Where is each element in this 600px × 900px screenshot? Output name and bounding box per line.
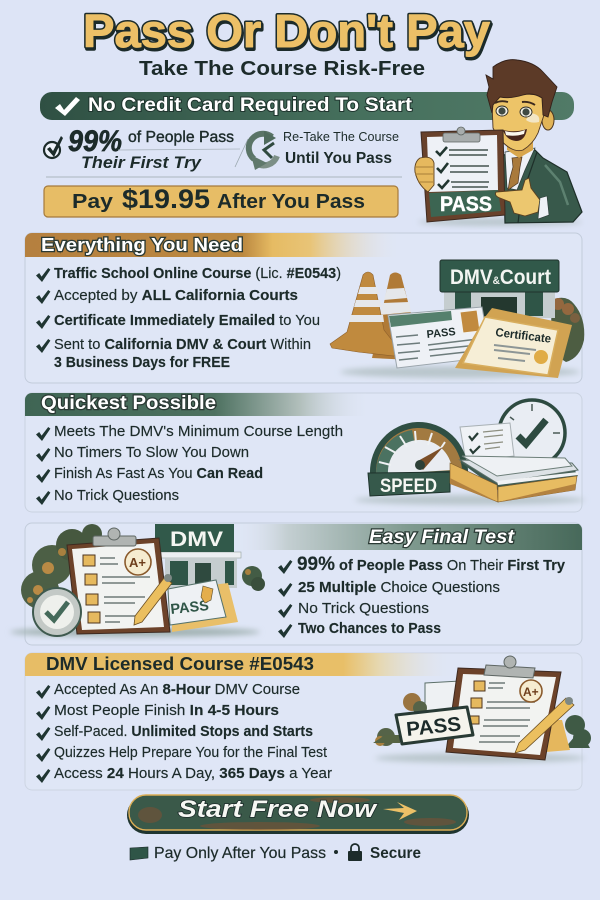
list: test facts (278, 554, 566, 638)
button label: Start Free Now (178, 796, 378, 823)
test clipboard (67, 528, 170, 634)
footer secure text: Secure (370, 845, 421, 862)
price bar (44, 184, 398, 217)
title: Pass Or Don't Pay (83, 5, 490, 57)
traffic cones (330, 272, 414, 360)
DMV and Court sign (440, 260, 559, 292)
list: course facts (36, 682, 332, 783)
bullet (334, 850, 338, 854)
icon: retake arrows (249, 131, 277, 170)
illustration: speedometer, clock and books (355, 400, 585, 505)
PASS card: PASS (170, 598, 210, 618)
parcel box (450, 463, 577, 502)
pass caption: of People Pass (128, 129, 234, 146)
list: test facts: 25 Multiple Choice Questions (298, 580, 500, 596)
panel: everything you need (25, 233, 584, 383)
speedometer (370, 422, 468, 480)
header band (25, 233, 400, 257)
list: speed features: Finish As Fast As You Can Read (54, 466, 263, 482)
list: speed features: No Trick Questions (54, 488, 179, 504)
clipboard (421, 127, 505, 222)
grade A+: A+ (129, 555, 146, 570)
certificate (455, 308, 572, 378)
pencil (134, 574, 172, 625)
icon: money (130, 847, 148, 860)
shirt and tie (505, 148, 535, 190)
DMV sign: DMV (170, 528, 223, 551)
panel: easy final test (10, 523, 582, 645)
benefit: 99 percent pass (44, 125, 234, 172)
certificate: Certificate (495, 325, 552, 346)
heading: Everything You Need (41, 234, 243, 255)
face (492, 92, 545, 151)
benefit: re-take (249, 129, 399, 170)
answer boxes (468, 681, 485, 724)
icon: arrow (383, 802, 417, 820)
PASS sign (396, 707, 473, 744)
title: Pass Or Don't Pay (84, 7, 491, 59)
list: speed features (36, 424, 343, 505)
list: speed features: No Timers To Slow You Down (54, 445, 249, 461)
list: features: Sent to California DMV & Court Within (54, 337, 311, 353)
character with clipboard (415, 60, 582, 226)
court building (444, 290, 555, 318)
pencil (515, 697, 574, 753)
list: test facts: No Trick Questions (298, 601, 429, 617)
clipboard checklist (436, 147, 489, 188)
header band (25, 653, 455, 676)
until pass line: Until You Pass (285, 150, 392, 167)
check badge (33, 588, 81, 636)
ear (542, 110, 554, 130)
list: course facts: Most People Finish In 4-5 Hours (54, 703, 279, 719)
panel: DMV licensed course (25, 653, 591, 790)
clip (484, 656, 535, 678)
illustration: clipboard and DMV (10, 524, 265, 637)
price text: $19.95 (122, 184, 210, 214)
licensed clipboard (446, 656, 561, 760)
list: features: Traffic School Online Course (Lic. #E0543) (54, 266, 341, 282)
banner text: No Credit Card Required To Start (88, 95, 413, 116)
DMV and Court sign: DMV&Court (450, 266, 551, 289)
list: features: Accepted by ALL California Courts (54, 288, 298, 304)
mouth (503, 129, 527, 141)
eyes (495, 101, 535, 117)
clip (93, 528, 136, 546)
price text: Pay (72, 191, 114, 213)
answer boxes (83, 555, 100, 623)
list: test facts: 99% of People Pass On Their First Try (297, 554, 566, 575)
title: Pass Or Don't Pay (83, 5, 490, 57)
DMV sign (155, 524, 234, 552)
ground shadow (418, 218, 582, 226)
checklist note (460, 423, 514, 462)
illustration: cones, documents and court (330, 260, 584, 378)
clipboard clip (443, 127, 480, 142)
icon: banner check (55, 97, 80, 116)
bush (550, 298, 584, 362)
neck (507, 138, 533, 158)
stack of papers (460, 456, 578, 490)
list: speed features: Meets The DMV's Minimum Course Length (54, 424, 343, 440)
list: course facts: Self-Paced. Unlimited Stops and Starts (54, 724, 313, 740)
list: features: 3 Business Days for FREE (54, 355, 230, 371)
heading: DMV Licensed Course #E0543 (46, 654, 314, 674)
PASS card (388, 307, 491, 368)
list: test facts: Two Chances to Pass (298, 621, 441, 637)
retake line: Re-Take The Course (283, 129, 399, 144)
grade A+: A+ (523, 685, 539, 699)
DMV building (161, 552, 241, 588)
suit (503, 150, 582, 223)
hair (486, 60, 557, 117)
PASS sign: PASS (405, 713, 462, 741)
heading: Quickest Possible (41, 392, 216, 414)
footer pay text: Pay Only After You Pass (154, 845, 326, 862)
list: features: Certificate Immediately Emailed to You (54, 313, 320, 329)
clipboard PASS label: PASS (440, 193, 492, 216)
SPEED sign (368, 472, 450, 497)
divider between benefits (235, 139, 248, 167)
left hand (415, 157, 434, 192)
bushes (21, 524, 265, 609)
subtitle: Take The Course Risk-Free (139, 57, 425, 80)
header band (25, 393, 370, 416)
footer note (130, 844, 421, 862)
list: course facts: Accepted As An 8-Hour DMV Course (54, 682, 300, 698)
illustration: clipboard and PASS sign (373, 656, 591, 763)
icon: lock (348, 844, 362, 861)
price text: After You Pass (217, 191, 365, 213)
gauge needle (416, 447, 443, 470)
certificate seal (534, 350, 548, 364)
icon: circled check (44, 136, 63, 158)
PASS card (168, 580, 238, 632)
99 percent figure: 99% (68, 125, 122, 158)
list: features (36, 266, 341, 371)
button: start free now (127, 795, 469, 834)
panel: quickest possible (25, 392, 585, 512)
list: course facts: Access 24 Hours A Day, 365 Days a Year (54, 766, 332, 782)
list: course facts: Quizzes Help Prepare You for the Final Test (54, 745, 327, 761)
clock (499, 400, 565, 466)
SPEED sign: SPEED (380, 476, 437, 497)
bushes and papers (373, 681, 591, 752)
right hand pointing (496, 178, 549, 219)
header band (235, 524, 582, 550)
banner: no credit card (40, 92, 574, 120)
PASS card: PASS (426, 326, 456, 341)
first try caption: Their First Try (81, 153, 203, 172)
heading: Easy Final Test (369, 526, 516, 548)
